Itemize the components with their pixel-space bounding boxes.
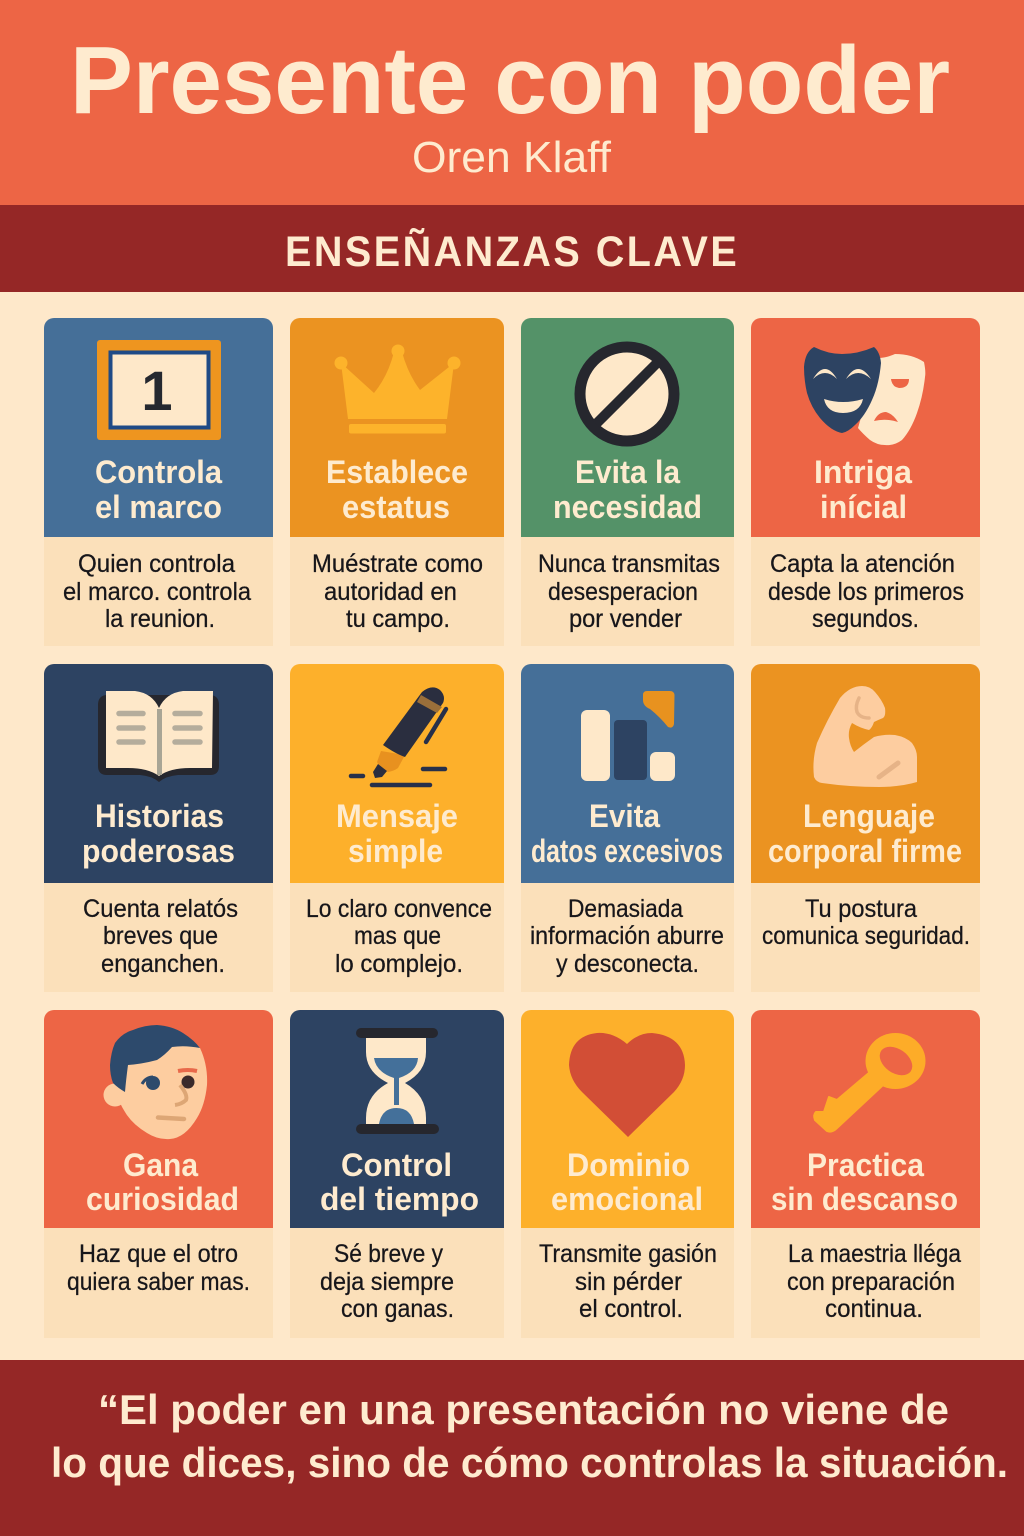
- description: Muéstrate como: [312, 550, 483, 578]
- heading: inícial: [820, 489, 907, 525]
- panel: establece estatus: [290, 318, 504, 646]
- heading: el marco: [95, 489, 222, 525]
- heading: Mensaje: [336, 798, 458, 834]
- heading: [531, 798, 723, 869]
- heading: [320, 1147, 479, 1217]
- description: el marco. controla: [63, 578, 251, 606]
- description: tu campo.: [346, 605, 450, 633]
- footer quote: “El poder en una presentación no viene de: [98, 1386, 949, 1433]
- description: información aburre: [530, 922, 724, 950]
- heading: Gana: [123, 1147, 198, 1183]
- heading: [814, 454, 912, 525]
- heading: Controla: [95, 454, 222, 490]
- heading: [95, 454, 222, 525]
- icon: open book: [98, 691, 219, 782]
- heading: Establece: [326, 454, 468, 490]
- description: deja siempre: [320, 1268, 454, 1296]
- description: Transmite gasión: [539, 1240, 717, 1268]
- heading: [336, 798, 458, 869]
- description: con preparación: [787, 1268, 955, 1296]
- description: con ganas.: [341, 1295, 454, 1323]
- description: desde los primeros: [768, 578, 964, 606]
- icon: key: [814, 1033, 926, 1132]
- icon: theater masks: [804, 347, 925, 445]
- heading: poderosas: [82, 833, 235, 869]
- panel: practica sin descanso: [751, 1010, 980, 1338]
- heading: [82, 798, 235, 869]
- heading: [326, 454, 468, 525]
- description: el control.: [579, 1295, 683, 1323]
- description: [530, 895, 724, 978]
- heading: simple: [348, 833, 443, 869]
- panel: lenguaje corporal firme: [751, 664, 980, 992]
- description: mas que: [354, 922, 441, 950]
- icon: curious face: [104, 1025, 207, 1139]
- section band: enseñanzas clave: ENSEÑANZAS CLAVE: [285, 227, 737, 275]
- heading: Evita: [589, 798, 660, 834]
- panel: gana curiosidad: [44, 1010, 273, 1338]
- description: continua.: [825, 1295, 923, 1323]
- description: sin pérder: [575, 1268, 682, 1296]
- description: Demasiada: [568, 895, 683, 923]
- heading: sin descanso: [771, 1181, 958, 1217]
- heading: del tiempo: [320, 1181, 479, 1217]
- description: [63, 550, 251, 633]
- heading: emocional: [551, 1181, 703, 1217]
- panel: historias poderosas: [44, 664, 273, 992]
- heading: estatus: [342, 489, 450, 525]
- panel: dominio emocional: [521, 1010, 734, 1338]
- heading: corporal firme: [768, 833, 962, 869]
- heading: Lenguaje: [803, 798, 935, 834]
- icon: flexed arm: [813, 686, 917, 787]
- description: breves que: [103, 922, 218, 950]
- description: Sé breve y: [334, 1240, 443, 1268]
- footer quote: [0, 1360, 1024, 1536]
- description: [306, 895, 492, 978]
- icon: numbered frame: [97, 340, 221, 440]
- section band: enseñanzas clave: [0, 205, 1024, 292]
- panel: control del tiempo: [290, 1010, 504, 1338]
- footer quote: lo que dices, sino de cómo controlas la situación.: [51, 1439, 1008, 1486]
- panel: controla el marco: [44, 318, 273, 646]
- description: quiera saber mas.: [67, 1268, 250, 1296]
- title: Presente con poder: [70, 27, 950, 134]
- description: desesperacion: [548, 578, 698, 606]
- panel: evita datos excesivos: [521, 664, 734, 992]
- heading: [86, 1147, 239, 1217]
- panel: intriga inicial: [751, 318, 980, 646]
- panel: evita la necesidad: [521, 318, 734, 646]
- description: La maestria lléga: [788, 1240, 961, 1268]
- icon: hourglass: [356, 1028, 439, 1134]
- description: lo complejo.: [335, 950, 463, 978]
- icon: bar chart: [581, 691, 675, 781]
- icon: numbered frame: 1: [141, 359, 173, 422]
- icon: prohibition sign: [580, 347, 674, 441]
- icon: pen writing: [351, 687, 446, 785]
- author: Oren Klaff: [412, 133, 612, 182]
- description: [762, 895, 970, 950]
- heading: Evita la: [575, 454, 680, 490]
- description: y desconecta.: [556, 950, 699, 978]
- heading: Historias: [95, 798, 224, 834]
- description: enganchen.: [101, 950, 225, 978]
- description: comunica seguridad.: [762, 922, 970, 950]
- heading: [768, 798, 962, 869]
- description: [320, 1240, 454, 1323]
- heading: Intriga: [814, 454, 912, 490]
- description: Cuenta relatós: [83, 895, 238, 923]
- heading: Practica: [807, 1147, 924, 1183]
- heading: [553, 454, 702, 525]
- description: Nunca transmitas: [538, 550, 720, 578]
- description: [539, 1240, 717, 1323]
- header banner: [0, 0, 1024, 205]
- description: [768, 550, 964, 633]
- heading: necesidad: [553, 489, 702, 525]
- description: segundos.: [812, 605, 919, 633]
- description: Lo claro convence: [306, 895, 492, 923]
- icon: heart: [569, 1033, 685, 1137]
- panel: mensaje simple: [290, 664, 504, 992]
- description: Capta la atención: [770, 550, 955, 578]
- description: por vender: [569, 605, 682, 633]
- icon: crown: [334, 344, 460, 434]
- heading: Dominio: [567, 1147, 690, 1183]
- heading: Control: [341, 1147, 452, 1183]
- heading: [551, 1147, 703, 1217]
- description: [67, 1240, 250, 1296]
- description: [787, 1240, 961, 1323]
- description: autoridad en: [324, 578, 457, 606]
- description: [312, 550, 483, 633]
- description: [83, 895, 238, 978]
- description: [538, 550, 720, 633]
- heading: datos excesivos: [531, 833, 723, 869]
- description: Haz que el otro: [79, 1240, 238, 1268]
- description: Tu postura: [805, 895, 917, 923]
- heading: [771, 1147, 958, 1217]
- description: Quien controla: [78, 550, 235, 578]
- description: la reunion.: [105, 605, 215, 633]
- heading: curiosidad: [86, 1181, 239, 1217]
